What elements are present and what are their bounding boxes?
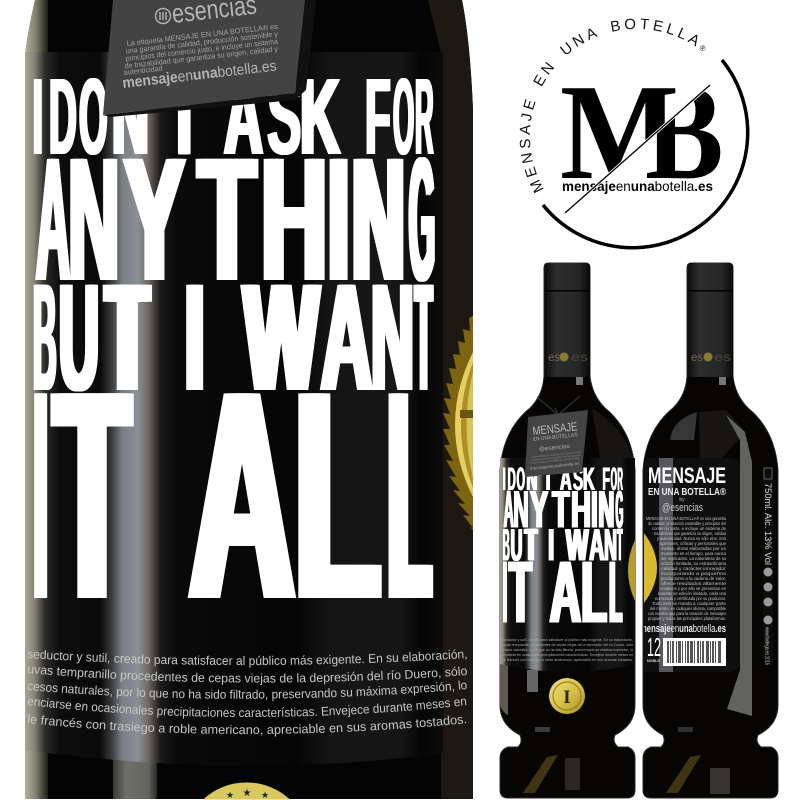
headline line 3 (33, 252, 434, 423)
small headline line 3: U (511, 519, 522, 570)
small front medal: I (563, 687, 571, 708)
small headline line 1: ' (538, 461, 541, 497)
tag logo mark (156, 8, 170, 24)
headline line 2: Y (124, 122, 185, 318)
tag url: mensajeenunabotella.es (122, 58, 277, 92)
back label paragraph: creativos y por ello se presentan en (660, 586, 727, 591)
headline line 1: ' (151, 56, 161, 178)
small headline line 2: A (504, 481, 514, 539)
small headline line 3: T (617, 519, 623, 570)
small tag title: MENSAJE (532, 419, 578, 438)
back label paragraph: Todo esto se manda a cualquier parte (652, 601, 727, 606)
tag paragraph (123, 22, 279, 77)
small headline line 3: A (589, 519, 604, 570)
small front paragraph: seductor y sutil, creado para satisfacer al público más exigente. En su elaboración, (503, 638, 633, 642)
small headline line 1: O (516, 461, 525, 497)
headline line 3: I (186, 252, 203, 423)
medal edge on front small bottle (628, 540, 635, 601)
headline line 2: N (352, 122, 404, 318)
logo monogram B: B (645, 56, 724, 208)
headline line 3: N (370, 252, 413, 423)
headline line 4: L (389, 330, 431, 662)
back label paragraph: trazabilidad que garantiza su origen, calidad (654, 531, 726, 536)
small bottle back body (643, 263, 778, 798)
headline line 4: T (55, 330, 130, 662)
small headline line 3: T (525, 519, 537, 570)
large headline (32, 56, 435, 662)
volume and alcohol text: 750ml. Alc. 13% Vol (763, 483, 773, 565)
small bottle back body: es (691, 350, 703, 364)
headline line 3: T (108, 252, 146, 423)
headline line 1: K (300, 56, 340, 178)
large medal bottom (203, 782, 290, 800)
small front paragraph: le francés con trasiego a roble americano, apreciable en sus aromas tostados. (503, 658, 633, 662)
tag paragraph: de trazabilidad que garantiza su origen, calidad y (124, 44, 278, 70)
back label paragraph: de calidad, producción sostenible y principios del (648, 521, 726, 526)
brand logo (520, 18, 750, 250)
headline line 2 (35, 122, 435, 318)
small headline line 1: K (583, 461, 595, 497)
headline line 3: A (321, 252, 372, 423)
headline line 1: I (32, 56, 44, 178)
back label url: mensajeenunabotella.es (640, 623, 726, 635)
small headline line 3: B (503, 519, 510, 570)
back label paragraph: botellas de edición limitada, cada una (658, 591, 727, 596)
small tag url: mensajeenunabotella.es (530, 461, 581, 471)
small headline line 3: I (549, 519, 554, 570)
side web text: www.bodega.es 2015 (764, 626, 770, 665)
small headline line 1: T (543, 461, 553, 497)
small headline line 1: A (560, 461, 572, 497)
small tag body lines: La etiqueta MENSAJE EN UNA BOTELLA es una garantía de calidad (531, 451, 581, 459)
back label age word: NOBLE (647, 658, 660, 663)
small headline line 2: H (571, 481, 591, 539)
small headline line 2: N (598, 481, 614, 539)
headline line 3: B (33, 252, 57, 423)
headline line 1: F (365, 56, 391, 178)
large bottle curved paragraph: seductor y sutil, creado para satisfacer al público más exigente. En su elaboración, (28, 650, 467, 668)
headline line 1: S (267, 56, 301, 178)
back label paragraph: invitan, obras elaboradas por un (661, 546, 727, 551)
headline line 1: D (49, 56, 76, 178)
small headline line 1: N (526, 461, 537, 497)
large bottle curved paragraph: enciarse en ocasionales precipitaciones características. Envejece durante meses en (28, 698, 466, 719)
headline line 3: T (415, 252, 433, 423)
headline line 4: I (32, 330, 49, 662)
headline line 1: O (79, 56, 107, 178)
small headline line 1 (502, 461, 623, 497)
small headline line 4 (502, 500, 624, 641)
back label paragraph: ser replicados. La naturaleza de su (661, 556, 727, 561)
small headline line 2: Y (530, 481, 548, 539)
small headline line 4: I (502, 543, 508, 641)
small headline line 4: L (581, 543, 607, 641)
small bottle front body: es (571, 350, 588, 364)
back label paragraph: numerada y certificada por su productor. (655, 596, 726, 601)
small bottle back body: es (714, 350, 731, 364)
back label paragraph: momento en el tiempo, para nunca (661, 551, 727, 556)
small headline line 2: G (615, 481, 623, 539)
small headline line 1: R (617, 461, 623, 497)
small headline line 4: A (550, 543, 581, 641)
small headline line 4: L (610, 543, 622, 641)
tag paragraph: una garantía de calidad, producción sostenible y (125, 29, 278, 55)
large bottle curved paragraph: uvas tempranillo procedentes de cepas viejas de la depresión del río Duero, sólo (28, 666, 467, 686)
headline line 2: T (198, 122, 255, 318)
headline line 2: I (328, 122, 350, 318)
side legal strip (763, 467, 773, 665)
back label medal (644, 533, 657, 603)
headline line 1 (32, 56, 434, 178)
back label paragraph: comercio justo, e incluye un sistema de (652, 526, 727, 531)
headline line 1: N (112, 56, 148, 178)
small headline line 1: I (502, 461, 506, 497)
small bottle headline (502, 461, 624, 641)
small front medal (549, 678, 585, 714)
small headline line 2: N (513, 481, 529, 539)
recycling icons (764, 568, 772, 624)
small headline line 2: T (552, 481, 569, 539)
back label paragraph (646, 516, 727, 621)
headline line 2: G (409, 122, 435, 318)
small headline line 3 (502, 519, 623, 570)
headline line 2: A (36, 122, 70, 318)
back label title: MENSAJE (648, 463, 726, 488)
headline line 4 (32, 330, 434, 662)
back label paragraph: incorporando a pequeños (661, 571, 727, 576)
small headline line 2: I (591, 481, 598, 539)
headline line 2: N (68, 122, 119, 318)
small headline line 1: F (602, 461, 610, 497)
large bottle curved paragraph: le francés con trasiego a roble americano, apreciable en sus aromas tostados. (28, 714, 466, 736)
logo circular text: MENSAJE EN UNA BOTELLA® (520, 18, 706, 194)
small tag body lines: e incluye un sistema de trazabilidad que garantiza su origen (530, 457, 580, 465)
headline line 1: O (393, 56, 414, 178)
small headline line 3: W (566, 519, 588, 570)
back label paragraph: propios y todas las principales plataformas. (648, 616, 726, 621)
back label paragraph: con nuestra app para la creación de mensajes (648, 611, 727, 616)
small headline line 1: D (507, 461, 516, 497)
small headline line 1: S (573, 461, 583, 497)
tag paragraph: principios del comercio justo, e incluye un sistema (125, 37, 279, 63)
small front paragraph: cesos naturales, por lo que no ha sido filtrado, preservando su máxima expresión, lo (503, 648, 633, 652)
large medal bottom: ★ (243, 788, 252, 799)
large bottle curved paragraph: cesos naturales, por lo que no ha sido filtrado, preservando su máxima expresión, lo (28, 680, 467, 702)
logo monogram M: M (560, 57, 679, 208)
headline line 3: U (59, 252, 99, 423)
logo diagonal (565, 85, 710, 213)
back label paragraph: productores a la cadena de valor, (661, 576, 726, 581)
back label subtitle: EN UNA BOTELLA® (648, 486, 726, 498)
back label brand: @esencias (662, 502, 703, 514)
small bottle front body (500, 263, 635, 798)
small tag brand: @esencias (539, 444, 570, 453)
back label paragraph: y autenticidad. Nunca es sólo vino. Son (657, 536, 726, 541)
headline line 2: H (261, 122, 328, 318)
small front paragraph (503, 638, 633, 662)
back label paragraph: calidad y carácter innovador (661, 566, 727, 571)
barcode (663, 638, 726, 666)
logo ring (543, 60, 748, 248)
small bottle back label (640, 458, 740, 672)
small headline line 4: T (509, 543, 532, 641)
back label paragraph: ofrece resultados altamente (661, 581, 727, 586)
back label by: by (679, 497, 685, 503)
gold medal seen at right edge of large bottle (443, 316, 473, 530)
headline line 1: T (166, 56, 202, 178)
back label paragraph: edición limitada, su extraordinaria (661, 561, 727, 566)
headline line 1: R (415, 56, 434, 178)
headline line 4: L (295, 330, 380, 662)
large bottle curved paragraph (28, 650, 467, 736)
tag paragraph: autenticidad (123, 64, 163, 77)
large bottle body (25, 0, 473, 799)
small headline line 2 (503, 481, 624, 539)
tag paragraph: La etiqueta MENSAJE EN UNA BOTELLA® es (126, 22, 278, 48)
back label paragraph: del mundo, en cualquier idioma, compatible (650, 606, 726, 611)
small bottle front body: es (548, 350, 560, 364)
small bottle back label: 12 (647, 632, 661, 662)
small hang tag (525, 396, 588, 477)
small tag body lines: producción sostenible y principios del comercio justo (531, 454, 581, 462)
small tag subtitle: EN UNA BOTELLA® (532, 431, 578, 443)
logo url: mensajeenunabotella.es (562, 178, 713, 194)
back label paragraph: opiniones, críticas y personales que (660, 541, 727, 546)
large hang tag (103, 0, 316, 117)
small front paragraph: uvas tempranillo procedentes de cepas viejas de la depresión del río Duero, sólo (503, 643, 633, 647)
headline line 4: A (190, 330, 294, 662)
small tag body lines (530, 451, 581, 465)
headline line 1: A (224, 56, 263, 178)
large bottle label (25, 52, 443, 766)
back label paragraph: MENSAJE EN UNA BOTELLA® es una garantía (646, 516, 726, 521)
small headline line 1: O (611, 461, 617, 497)
small headline line 3: N (604, 519, 617, 570)
small front paragraph: enciarse en ocasionales precipitaciones características. Envejece durante meses en (503, 653, 633, 657)
headline line 3: W (244, 252, 318, 423)
small bottle front label (500, 458, 635, 672)
